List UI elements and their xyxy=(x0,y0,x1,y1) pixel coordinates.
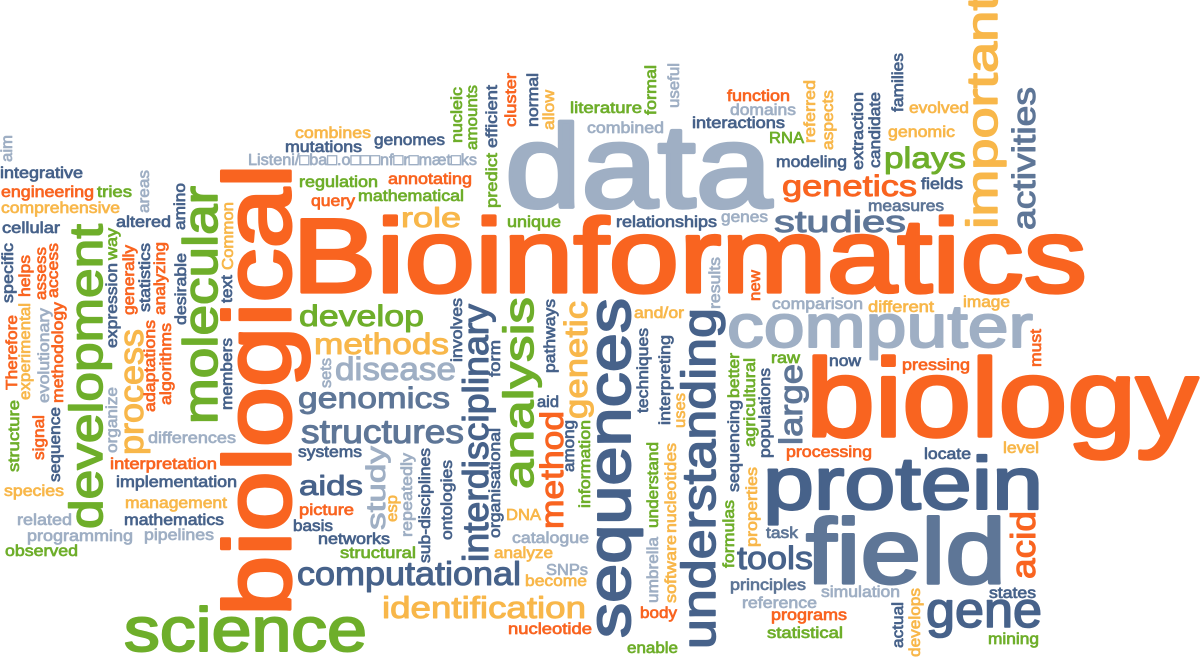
word: involves: involves xyxy=(449,298,466,362)
word: become: become xyxy=(525,573,587,590)
word: candidate: candidate xyxy=(867,92,884,168)
word: integrative: integrative xyxy=(0,165,83,182)
word: computational: computational xyxy=(297,555,521,592)
word: text: text xyxy=(219,274,236,303)
word: level: level xyxy=(1003,440,1039,457)
word: processing: processing xyxy=(786,444,872,461)
word: helps: helps xyxy=(17,255,34,297)
word: structures: structures xyxy=(301,413,464,450)
word: amounts: amounts xyxy=(464,85,481,150)
word: normal: normal xyxy=(525,73,542,127)
word: generally: generally xyxy=(121,245,138,315)
word: annotating: annotating xyxy=(388,171,472,188)
word: differences: differences xyxy=(148,430,236,447)
word: analysis: analysis xyxy=(495,297,542,489)
word: modeling: modeling xyxy=(776,154,847,171)
word: form: form xyxy=(487,340,504,377)
word: pipelines: pipelines xyxy=(144,527,214,544)
word: systems: systems xyxy=(298,444,362,461)
word: DNA: DNA xyxy=(506,507,541,524)
word: software: software xyxy=(663,535,680,603)
word: referred: referred xyxy=(802,80,819,143)
word: programs: programs xyxy=(771,607,847,624)
word: algorithms: algorithms xyxy=(158,323,175,405)
word: uses: uses xyxy=(672,393,689,428)
word: members: members xyxy=(219,338,236,410)
word: Bioinformatics: Bioinformatics xyxy=(292,198,1087,315)
word: species: species xyxy=(4,483,64,500)
word: acid: acid xyxy=(1005,511,1043,579)
word: reference: reference xyxy=(742,595,817,612)
word: process: process xyxy=(113,329,151,455)
word: programming: programming xyxy=(27,528,133,545)
word: structure: structure xyxy=(6,400,23,472)
word: nucleotides: nucleotides xyxy=(663,443,680,533)
word: umbrella: umbrella xyxy=(645,537,662,603)
word: sets: sets xyxy=(318,358,335,388)
word: molecular: molecular xyxy=(175,186,228,424)
word: cellular: cellular xyxy=(2,220,61,237)
word: activities: activities xyxy=(1006,87,1042,230)
word: task: task xyxy=(766,525,799,542)
word: comparison: comparison xyxy=(772,296,863,313)
word: interpretation: interpretation xyxy=(110,456,217,473)
word: actual: actual xyxy=(890,602,907,648)
word: structural: structural xyxy=(340,545,416,562)
word: populations: populations xyxy=(757,368,774,458)
word: large: large xyxy=(773,364,809,445)
word: data: data xyxy=(505,101,772,233)
word: among: among xyxy=(561,420,578,472)
word: pronunciation: Listeni/□ba□.o□□□nf□r□mæt□ks xyxy=(248,152,477,169)
word: simulation: simulation xyxy=(821,584,900,601)
word: plays: plays xyxy=(884,142,966,175)
word: develop: develop xyxy=(299,300,424,333)
word: field: field xyxy=(806,501,1006,603)
word: mining: mining xyxy=(988,631,1039,648)
word: formulas: formulas xyxy=(721,500,738,568)
word: fields: fields xyxy=(921,176,963,193)
word: sequence: sequence xyxy=(47,407,64,482)
word: genes: genes xyxy=(721,209,768,226)
word: RNA: RNA xyxy=(769,130,804,147)
word: pressing: pressing xyxy=(902,357,970,374)
word: altered: altered xyxy=(116,214,171,231)
word: and/or: and/or xyxy=(634,305,685,322)
word: catalogue: catalogue xyxy=(512,530,589,547)
word: implementation: implementation xyxy=(116,474,237,491)
word: basis: basis xyxy=(293,518,333,535)
word: locate: locate xyxy=(924,446,971,463)
word: genetic: genetic xyxy=(558,301,594,419)
word: SNPs: SNPs xyxy=(546,562,588,579)
word: must: must xyxy=(1028,328,1045,367)
word: genomes: genomes xyxy=(374,132,445,149)
word: adaptations: adaptations xyxy=(142,320,159,412)
word: biological: biological xyxy=(205,164,311,616)
word: genetics: genetics xyxy=(782,170,917,203)
word: combines: combines xyxy=(295,125,371,142)
word: evolutionary: evolutionary xyxy=(36,308,53,403)
word: observed: observed xyxy=(5,543,78,560)
word: mutations: mutations xyxy=(285,139,362,156)
word: sequences: sequences xyxy=(576,298,643,638)
word: body: body xyxy=(640,605,677,622)
word: literature: literature xyxy=(570,100,642,117)
word: tries: tries xyxy=(97,184,132,201)
word: identification: identification xyxy=(382,590,586,625)
word: pathways: pathways xyxy=(542,299,559,373)
word: areas: areas xyxy=(136,170,153,213)
word: computer: computer xyxy=(727,293,1033,360)
word: networks: networks xyxy=(318,531,390,548)
word: useful: useful xyxy=(666,63,683,108)
word: cluster: cluster xyxy=(503,72,520,127)
word: analyzing: analyzing xyxy=(152,242,169,315)
word: role: role xyxy=(401,202,461,233)
word: aids: aids xyxy=(299,470,363,501)
word: properties: properties xyxy=(744,467,761,547)
word: methods: methods xyxy=(314,328,449,361)
word: raw: raw xyxy=(771,350,801,367)
word: management: management xyxy=(125,495,228,512)
word: agricultural: agricultural xyxy=(742,358,759,447)
word: image: image xyxy=(963,294,1010,311)
word: extraction: extraction xyxy=(850,92,867,170)
word: query: query xyxy=(311,193,355,210)
word: genomic: genomic xyxy=(888,124,955,141)
word: allow: allow xyxy=(541,90,558,130)
word: evolved: evolved xyxy=(909,100,969,117)
word: picture: picture xyxy=(299,502,354,519)
word: function: function xyxy=(727,88,790,105)
word: important: important xyxy=(958,0,1007,229)
word: domains: domains xyxy=(730,102,796,119)
word: experimental: experimental xyxy=(17,303,34,400)
word: new: new xyxy=(747,270,764,301)
word: tools: tools xyxy=(737,540,813,576)
word: efficient: efficient xyxy=(484,84,501,148)
word: organize: organize xyxy=(104,387,121,453)
word: ontologies: ontologies xyxy=(439,460,456,540)
word: different: different xyxy=(868,299,935,316)
word: regulation: regulation xyxy=(299,174,378,191)
word: relationships: relationships xyxy=(616,214,717,231)
word: results: results xyxy=(707,257,724,309)
word: method: method xyxy=(534,411,570,529)
word: Common: Common xyxy=(220,202,237,270)
word: methodology: methodology xyxy=(50,302,67,403)
word: techniques: techniques xyxy=(635,328,652,413)
word: aspects: aspects xyxy=(820,90,837,150)
word: disease: disease xyxy=(335,351,456,387)
word: Therefore: Therefore xyxy=(4,315,21,390)
word: biology: biology xyxy=(806,337,1198,460)
word: protein: protein xyxy=(763,442,1043,525)
word: study: study xyxy=(361,445,391,530)
word: better: better xyxy=(726,352,743,398)
word: statistical: statistical xyxy=(767,625,843,642)
word: organisational: organisational xyxy=(487,428,504,538)
word: genomics: genomics xyxy=(298,382,450,415)
word: access: access xyxy=(45,243,62,298)
word: statistics: statistics xyxy=(137,243,154,312)
word: understand: understand xyxy=(645,442,662,528)
word: desirable: desirable xyxy=(173,253,190,325)
word: engineering: engineering xyxy=(1,184,94,201)
word: nucleic: nucleic xyxy=(449,87,466,143)
word: understanding: understanding xyxy=(672,308,725,649)
word: interactions: interactions xyxy=(692,115,785,132)
word: unique: unique xyxy=(507,214,561,231)
word: assess: assess xyxy=(33,247,50,300)
word: studies: studies xyxy=(774,204,906,239)
word: gene: gene xyxy=(926,582,1042,638)
word: signal: signal xyxy=(31,415,48,460)
word: interpreting: interpreting xyxy=(657,335,674,425)
word: development: development xyxy=(60,224,112,529)
word: families: families xyxy=(890,53,907,112)
word: formal: formal xyxy=(643,65,660,115)
word: states: states xyxy=(989,585,1036,602)
word: comprehensive: comprehensive xyxy=(1,200,120,217)
word: mathematics: mathematics xyxy=(124,512,224,529)
word: nucleotide: nucleotide xyxy=(508,621,592,638)
word: mathematical: mathematical xyxy=(358,188,464,205)
word: related: related xyxy=(17,512,72,529)
word: specific: specific xyxy=(0,243,17,303)
word: aid: aid xyxy=(537,394,559,411)
word: combined: combined xyxy=(587,120,664,137)
word: sequencing: sequencing xyxy=(726,400,743,492)
word: enable: enable xyxy=(627,640,678,657)
word: sub-disciplines: sub-disciplines xyxy=(417,448,434,563)
word: analyze: analyze xyxy=(494,545,553,562)
word: expression: expression xyxy=(104,263,121,348)
word: now: now xyxy=(829,353,861,370)
word: amino: amino xyxy=(172,183,189,230)
word: repeatedly: repeatedly xyxy=(399,453,416,537)
word: way: way xyxy=(104,228,121,261)
word: information: information xyxy=(577,420,594,508)
word: principles: principles xyxy=(730,577,806,594)
word: develops: develops xyxy=(907,588,924,657)
word: predict: predict xyxy=(484,152,501,208)
word: esp: esp xyxy=(384,495,401,522)
word: measures: measures xyxy=(868,198,944,215)
word: interdisciplinary: interdisciplinary xyxy=(455,304,496,562)
